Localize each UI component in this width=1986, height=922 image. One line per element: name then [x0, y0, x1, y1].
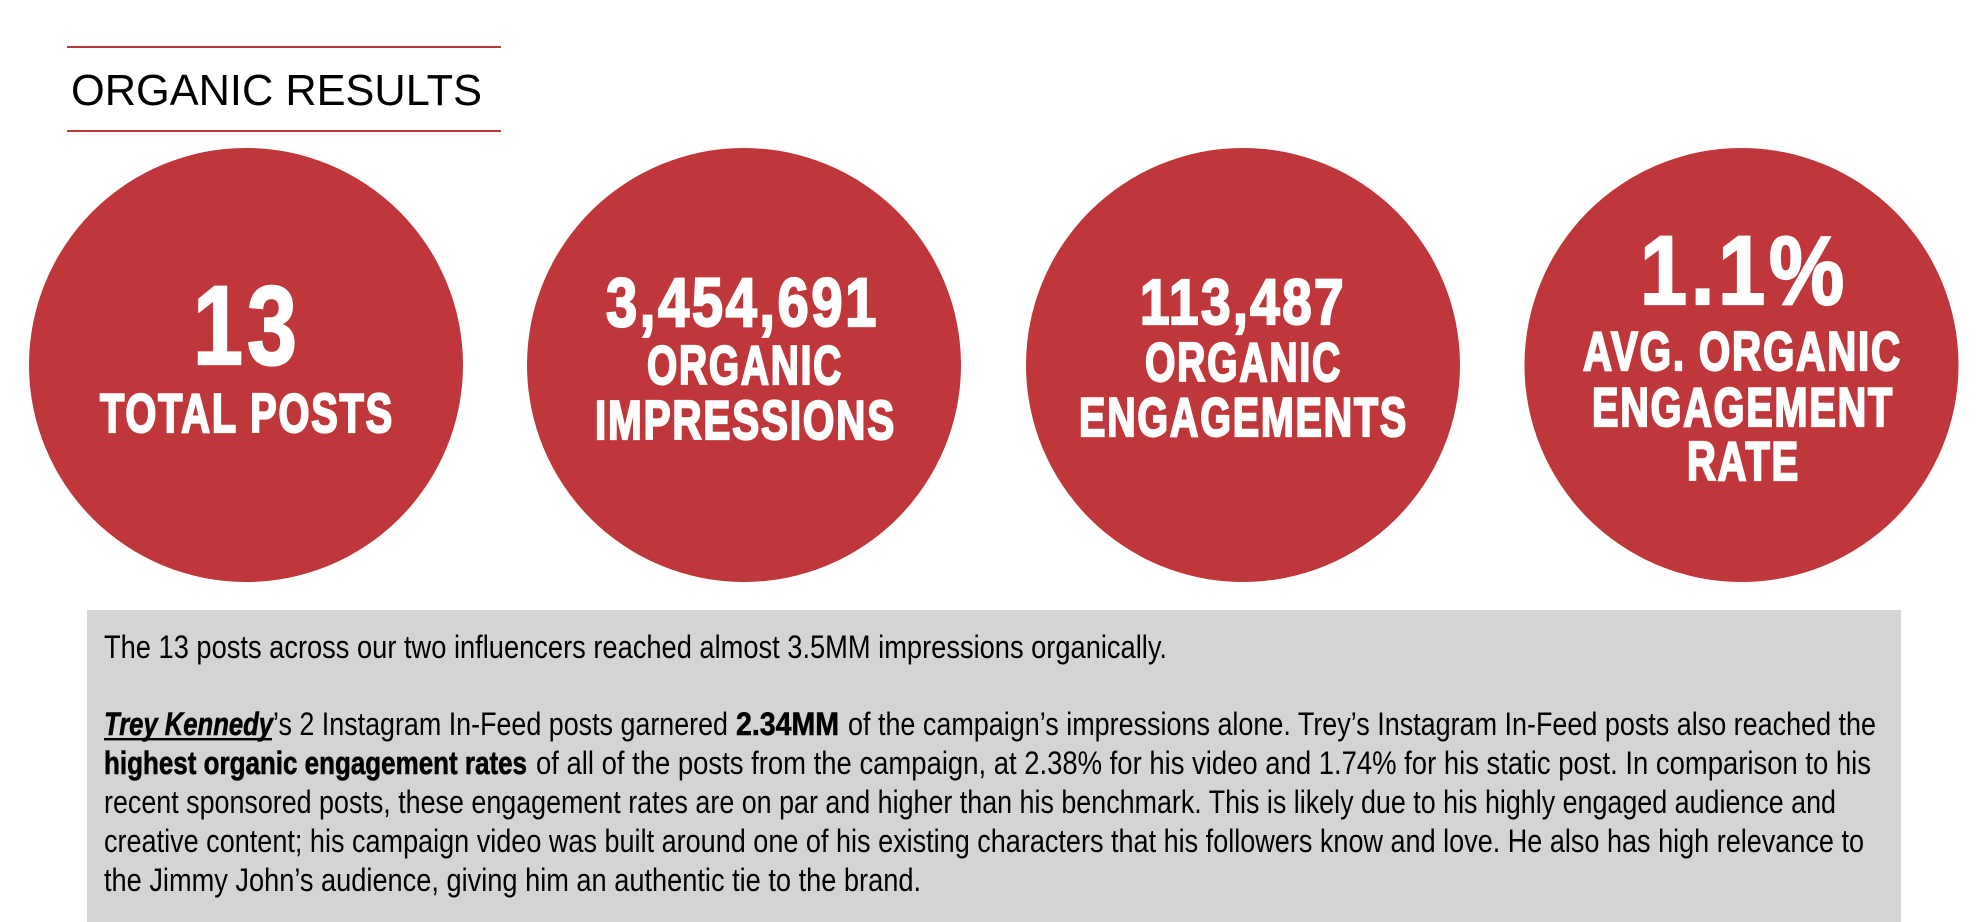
stat circle: organic engagements: ENGAGEMENTS [1079, 386, 1408, 448]
stat circle: organic impressions [527, 148, 961, 582]
panel: commentary: highest organic engagement rates [104, 745, 527, 781]
panel: commentary: ’s 2 Instagram In-Feed posts garnered [273, 706, 728, 742]
stat circle: total posts: TOTAL POSTS [100, 382, 394, 444]
panel: commentary: The 13 posts across our two influencers reached almost 3.5MM impressions organically. [104, 629, 1167, 665]
panel: commentary: Trey Kennedy [104, 706, 275, 742]
stat circle: organic engagements: ORGANIC [1145, 331, 1342, 393]
panel: commentary: the Jimmy John’s audience, giving him an authentic tie to the brand. [104, 862, 921, 898]
stat circle: organic impressions: IMPRESSIONS [595, 389, 896, 451]
stat circle: organic impressions: ORGANIC [647, 334, 843, 396]
panel: commentary [87, 610, 1901, 922]
stat circle: average organic engagement rate: 1.1% [1640, 216, 1848, 325]
panel: commentary: 2.34MM [736, 706, 839, 742]
stat circle: average organic engagement rate [1524, 148, 1958, 582]
heading: organic results: ORGANIC RESULTS [71, 66, 482, 115]
stat circle: average organic engagement rate: RATE [1687, 430, 1800, 492]
stat circle: total posts: 13 [193, 263, 301, 388]
stat circle: organic engagements: 113,487 [1140, 266, 1346, 338]
stat circle: organic engagements [1026, 148, 1460, 582]
stat circle: organic impressions: 3,454,691 [606, 264, 879, 341]
stat circle: total posts [29, 148, 463, 582]
